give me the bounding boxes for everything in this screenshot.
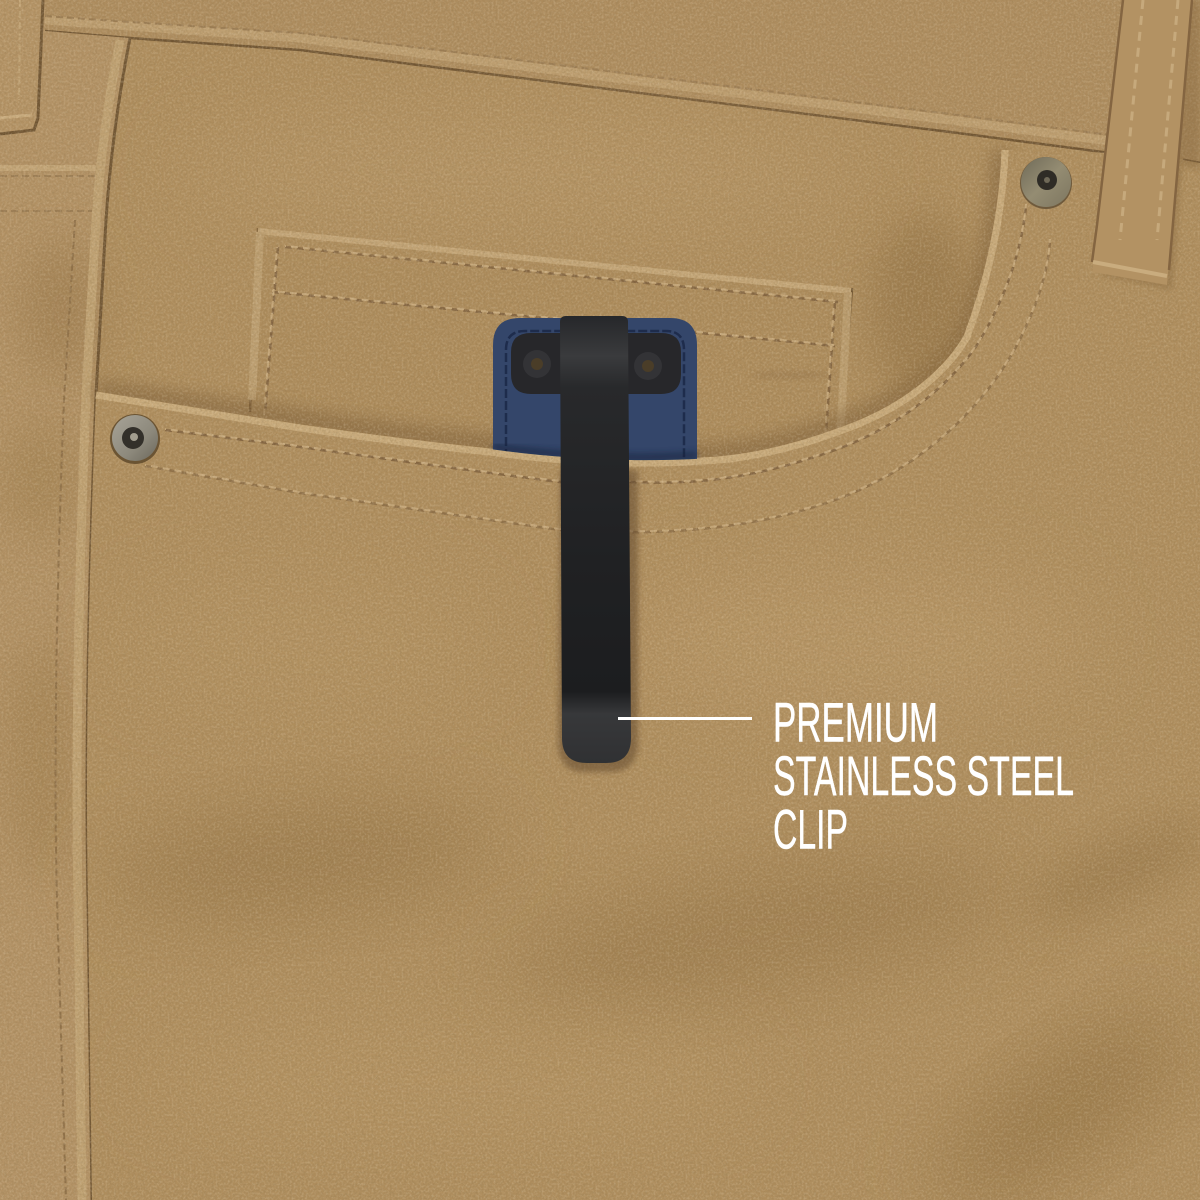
clip shadow bbox=[558, 470, 638, 772]
left side panel bbox=[0, 0, 130, 1200]
left rivet bbox=[110, 414, 160, 464]
stainless steel clip bbox=[560, 316, 631, 763]
callout label: CLIP bbox=[773, 798, 848, 860]
left belt loop bbox=[0, 0, 43, 134]
mounting plate bbox=[511, 333, 681, 394]
pocket opening shadow bbox=[96, 150, 1002, 456]
callout label bbox=[773, 690, 1074, 860]
shaded hollow beside pocket bbox=[870, 215, 980, 405]
callout line bbox=[618, 717, 752, 720]
callout label: PREMIUM bbox=[773, 690, 938, 754]
right belt loop bbox=[1092, 0, 1200, 290]
waistband bbox=[45, 0, 1200, 163]
right rivet bbox=[1020, 157, 1072, 209]
coin pocket bbox=[250, 228, 852, 460]
navy wallet bbox=[493, 318, 697, 470]
